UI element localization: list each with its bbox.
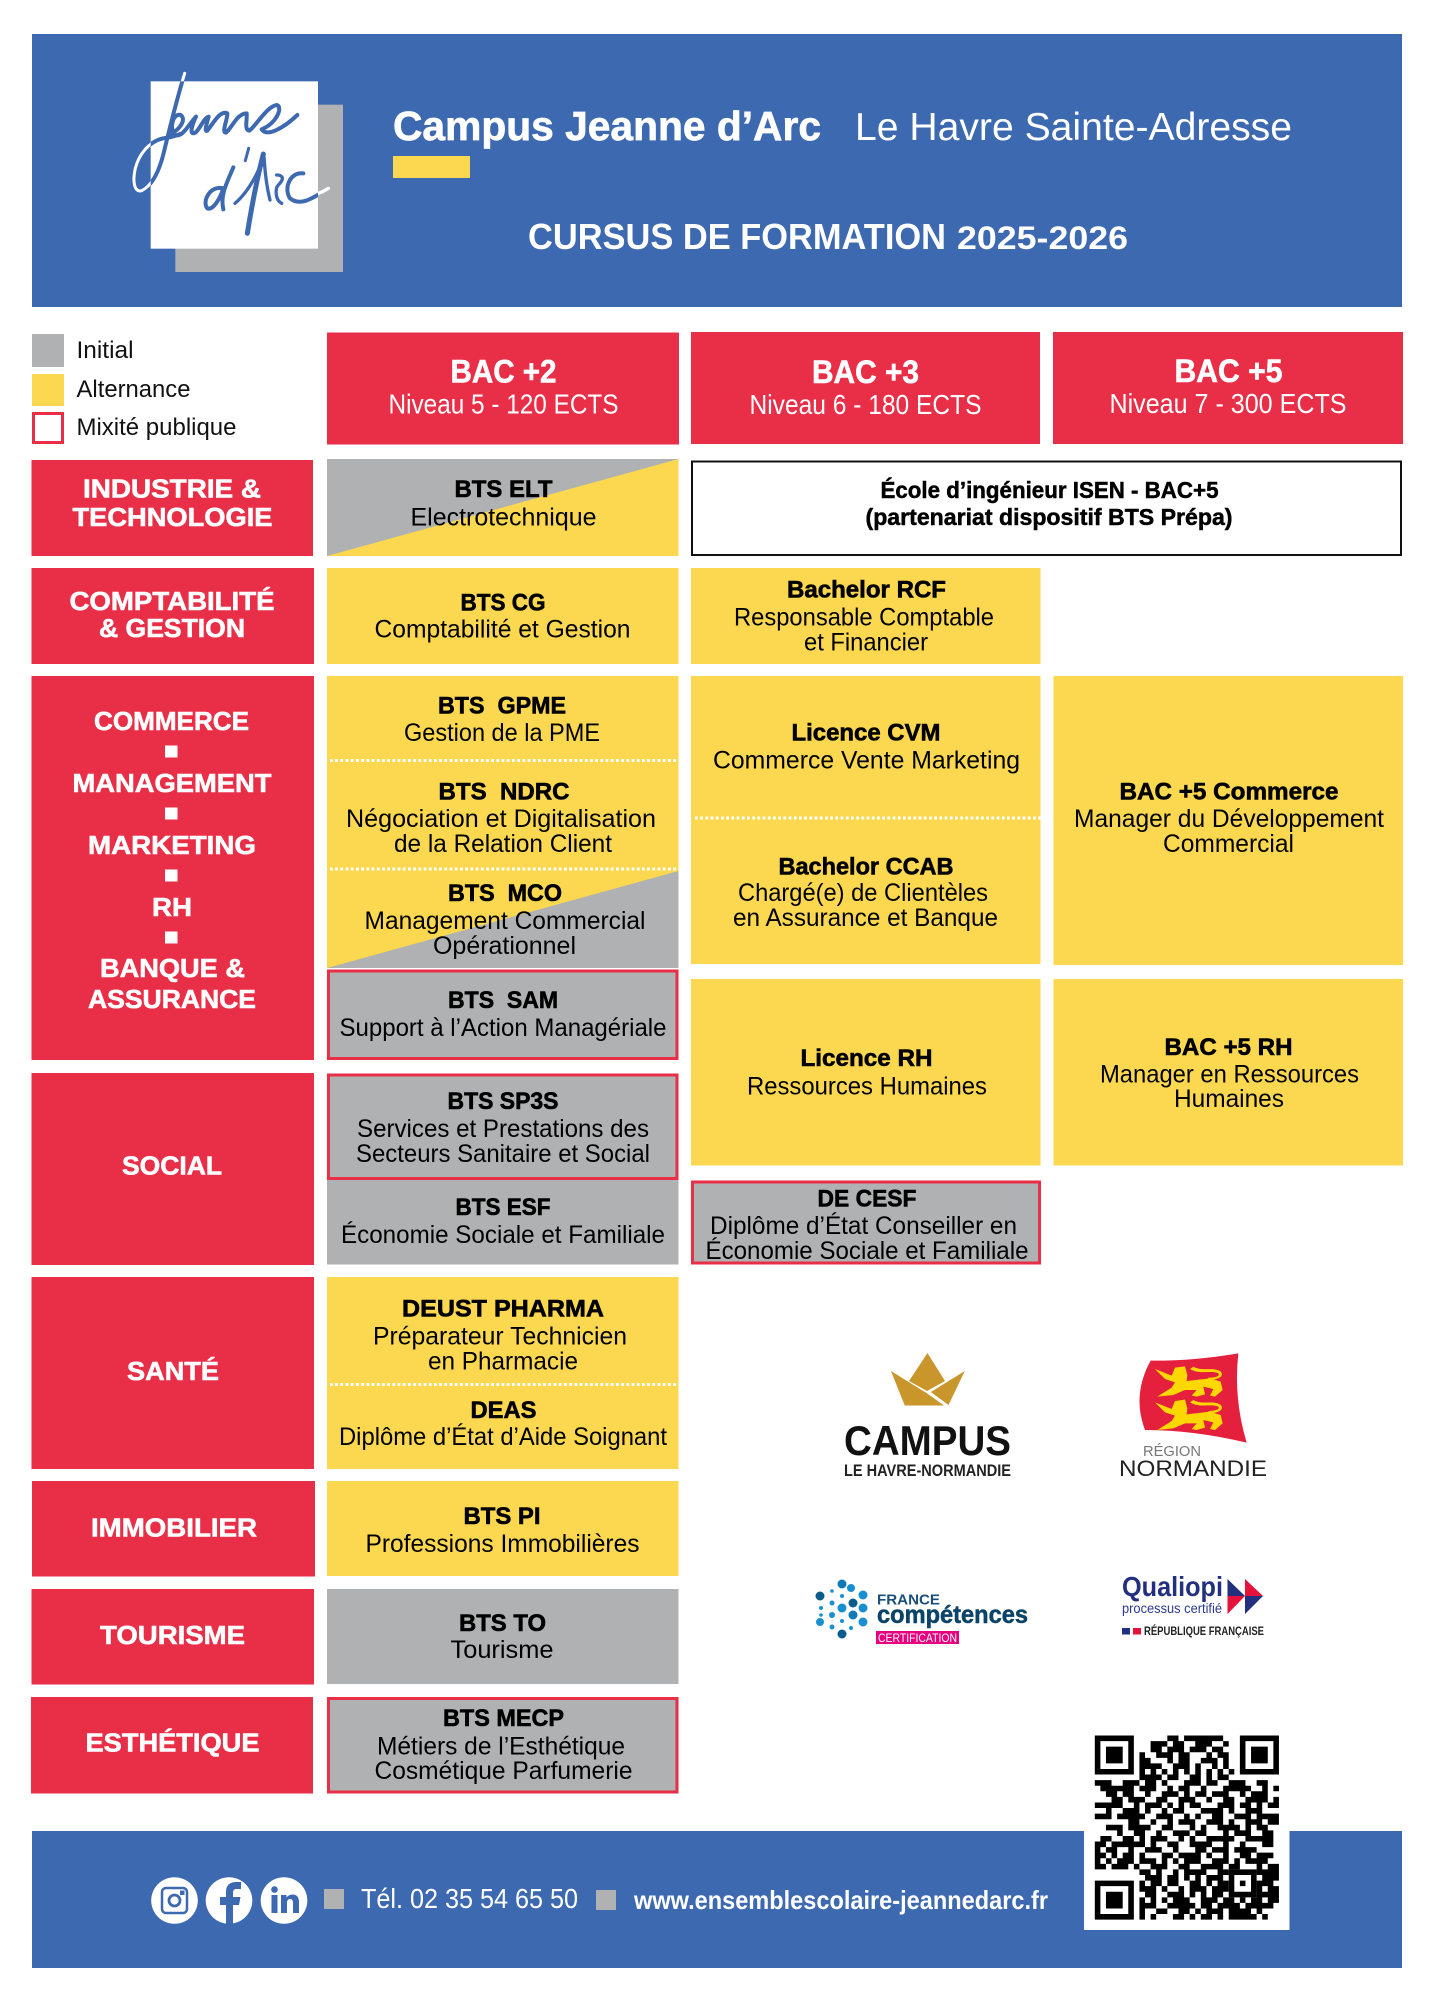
column header: BAC +2: BAC +2 bbox=[450, 354, 556, 390]
BTS MECP: BTS MECP bbox=[443, 1705, 564, 1732]
Licence CVM: Commerce Vente Marketing bbox=[713, 746, 1020, 774]
DE CESF bbox=[692, 1182, 1040, 1265]
icon: Facebook bbox=[206, 1877, 252, 1924]
logo: France compétences: CERTIFICATION bbox=[878, 1631, 957, 1645]
BTS ELT: BTS ELT bbox=[454, 476, 553, 503]
BAC +5 Commerce bbox=[1054, 676, 1403, 965]
column header: BAC +5 bbox=[1053, 332, 1403, 444]
BTS GPME: BTS GPME bbox=[438, 692, 566, 720]
Bachelor CCAB bbox=[733, 854, 998, 932]
BTS ESF bbox=[327, 1180, 678, 1264]
DEAS: Diplôme d’État d’Aide Soignant bbox=[339, 1422, 667, 1451]
BTS NDRC bbox=[346, 778, 656, 858]
DE CESF: DE CESF bbox=[818, 1186, 916, 1212]
category: Commerce, management, marketing, RH, banque et assurance: RH bbox=[152, 892, 192, 922]
BAC +5 RH bbox=[1054, 979, 1403, 1166]
subtitle: 2025-2026 bbox=[957, 220, 1128, 256]
logo: France compétences bbox=[816, 1580, 1028, 1645]
Licence CVM bbox=[713, 720, 1020, 774]
column header: BAC +3 bbox=[691, 332, 1040, 444]
logo: Région Normandie: RÉGION bbox=[1143, 1443, 1201, 1460]
BTS PI: BTS PI bbox=[464, 1503, 540, 1530]
category: Commerce, management, marketing, RH, banque et assurance: COMMERCE bbox=[94, 706, 249, 736]
category: Tourisme: TOURISME bbox=[100, 1620, 245, 1650]
BTS TO: Tourisme bbox=[450, 1636, 554, 1664]
DEUST PHARMA: Préparateur Technicien bbox=[373, 1322, 627, 1350]
legend: Mixité publique bbox=[76, 414, 236, 441]
logo: France compétences: compétences bbox=[877, 1601, 1028, 1629]
logo: Qualiopi: processus certifié bbox=[1122, 1601, 1222, 1616]
QR code bbox=[1084, 1724, 1290, 1930]
Bachelor CCAB: Chargé(e) de Clientèles bbox=[738, 879, 988, 907]
category: Immobilier: IMMOBILIER bbox=[91, 1512, 257, 1542]
category: Industrie et technologie: INDUSTRIE & bbox=[83, 474, 261, 504]
logo: France compétences: FRANCE bbox=[877, 1592, 940, 1608]
BTS SAM bbox=[328, 971, 677, 1058]
École d'ingénieur ISEN: École d’ingénieur ISEN - BAC+5 bbox=[880, 476, 1219, 503]
Licence CVM and Bachelor CCAB bbox=[691, 676, 1040, 964]
BTS ELT bbox=[327, 459, 678, 556]
separator square bbox=[324, 1889, 344, 1909]
category: Tourisme bbox=[32, 1589, 314, 1684]
Bachelor RCF: et Financier bbox=[804, 628, 928, 656]
title: Campus Jeanne d’Arc bbox=[393, 103, 821, 149]
BTS MCO: Opérationnel bbox=[433, 932, 576, 960]
BTS SAM: BTS SAM bbox=[448, 987, 558, 1014]
category: Social bbox=[32, 1073, 314, 1265]
École d'ingénieur ISEN bbox=[692, 462, 1401, 555]
BAC +5 Commerce: BAC +5 Commerce bbox=[1120, 778, 1338, 806]
category: Immobilier bbox=[32, 1481, 315, 1576]
BTS MECP: Métiers de l’Esthétique bbox=[377, 1732, 625, 1760]
category: Comptabilité et gestion bbox=[32, 568, 314, 664]
DEUST PHARMA: DEUST PHARMA bbox=[402, 1296, 604, 1322]
icon: LinkedIn bbox=[261, 1877, 307, 1924]
phone number: Tél. 02 35 54 65 50 bbox=[361, 1883, 578, 1914]
category: Commerce, management, marketing, RH, banque et assurance: MARKETING bbox=[88, 830, 256, 860]
logo: Campus Le Havre-Normandie bbox=[844, 1353, 1011, 1480]
title: Le Havre Sainte-Adresse bbox=[855, 106, 1292, 149]
BTS TO bbox=[327, 1589, 678, 1684]
logo: Campus Le Havre-Normandie: CAMPUS bbox=[844, 1417, 1011, 1464]
DEAS: DEAS bbox=[470, 1397, 536, 1424]
BTS SP3S: Services et Prestations des bbox=[357, 1115, 649, 1143]
column header: BAC +2 bbox=[327, 332, 679, 444]
category: Santé bbox=[32, 1277, 314, 1469]
BTS SP3S: BTS SP3S bbox=[448, 1088, 558, 1115]
logo: Qualiopi bbox=[1122, 1571, 1264, 1638]
category: Commerce, management, marketing, RH, banque et assurance: MANAGEMENT bbox=[72, 768, 272, 798]
BTS SP3S bbox=[328, 1075, 677, 1178]
category: Commerce, management, marketing, RH, banque et assurance: ASSURANCE bbox=[88, 984, 256, 1014]
legend: Alternance bbox=[76, 376, 190, 403]
BTS CG: Comptabilité et Gestion bbox=[374, 616, 630, 644]
DEUST PHARMA and DEAS bbox=[327, 1277, 678, 1469]
DE CESF: Économie Sociale et Familiale bbox=[706, 1236, 1028, 1265]
BTS SP3S: Secteurs Sanitaire et Social bbox=[356, 1140, 650, 1168]
logo: Région Normandie: NORMANDIE bbox=[1119, 1456, 1267, 1481]
BTS MECP: Cosmétique Parfumerie bbox=[374, 1757, 632, 1785]
Licence RH: Licence RH bbox=[800, 1045, 932, 1072]
category: Esthétique bbox=[31, 1697, 313, 1794]
BTS PI bbox=[327, 1481, 678, 1576]
legend bbox=[32, 334, 236, 442]
logo: Qualiopi: RÉPUBLIQUE FRANÇAISE bbox=[1144, 1625, 1264, 1638]
BTS ESF: BTS ESF bbox=[456, 1194, 550, 1221]
Licence CVM: Licence CVM bbox=[792, 720, 940, 746]
DEUST PHARMA bbox=[373, 1296, 627, 1376]
BTS CG: BTS CG bbox=[460, 590, 546, 616]
Bachelor CCAB: en Assurance et Banque bbox=[733, 904, 998, 932]
BTS MECP bbox=[328, 1698, 677, 1792]
column header: BAC +3: BAC +3 bbox=[812, 354, 919, 390]
Commerce BTS block: GPME, NDRC, MCO bbox=[327, 676, 678, 968]
category: Industrie et technologie bbox=[32, 460, 313, 556]
DEUST PHARMA: en Pharmacie bbox=[428, 1348, 578, 1376]
title bbox=[393, 103, 1292, 149]
BTS NDRC: de la Relation Client bbox=[394, 830, 612, 858]
category: Industrie et technologie: TECHNOLOGIE bbox=[72, 502, 272, 532]
icon: Instagram bbox=[151, 1877, 198, 1924]
logo: Région Normandie bbox=[1119, 1353, 1267, 1481]
BTS NDRC: BTS NDRC bbox=[438, 778, 570, 806]
category: Commerce, management, marketing, RH, banque et assurance bbox=[32, 676, 314, 1060]
Bachelor RCF: Bachelor RCF bbox=[787, 576, 946, 604]
BTS GPME bbox=[404, 692, 600, 747]
BTS GPME: Gestion de la PME bbox=[404, 719, 600, 747]
BTS PI: Professions Immobilières bbox=[366, 1530, 640, 1558]
category: Comptabilité et gestion: & GESTION bbox=[99, 613, 245, 643]
category: Commerce, management, marketing, RH, banque et assurance: BANQUE & bbox=[100, 953, 245, 983]
subtitle: CURSUS DE FORMATION bbox=[528, 216, 946, 257]
legend: Initial bbox=[76, 337, 134, 364]
BTS MCO bbox=[364, 880, 646, 960]
category: Santé: SANTÉ bbox=[127, 1356, 219, 1386]
BTS CG bbox=[327, 568, 678, 664]
separator square bbox=[596, 1890, 616, 1910]
BTS MCO: Management Commercial bbox=[364, 907, 646, 935]
column header: BAC +2: Niveau 5 - 120 ECTS bbox=[388, 388, 618, 420]
BAC +5 RH: Manager en Ressources bbox=[1100, 1060, 1359, 1088]
BTS NDRC: Négociation et Digitalisation bbox=[346, 805, 656, 833]
Bachelor RCF bbox=[691, 568, 1040, 664]
Bachelor CCAB: Bachelor CCAB bbox=[778, 854, 954, 880]
column header: BAC +5: Niveau 7 - 300 ECTS bbox=[1110, 388, 1346, 419]
website: www.ensemblescolaire-jeannedarc.fr bbox=[633, 1885, 1048, 1915]
DEAS bbox=[339, 1397, 667, 1451]
BTS TO: BTS TO bbox=[459, 1610, 546, 1637]
column header: BAC +3: Niveau 6 - 180 ECTS bbox=[750, 389, 982, 420]
logo: Campus Le Havre-Normandie: LE HAVRE-NORMANDIE bbox=[844, 1461, 1011, 1480]
category: Esthétique: ESTHÉTIQUE bbox=[86, 1728, 260, 1758]
footer bar bbox=[32, 1831, 1402, 1968]
logo: Qualiopi: Qualiopi bbox=[1122, 1571, 1223, 1602]
header banner bbox=[32, 34, 1402, 307]
Bachelor RCF: Responsable Comptable bbox=[734, 604, 994, 632]
category: Social: SOCIAL bbox=[122, 1150, 222, 1180]
DE CESF: Diplôme d’État Conseiller en bbox=[710, 1211, 1017, 1240]
BTS SAM: Support à l’Action Managériale bbox=[340, 1014, 666, 1042]
BTS MCO: BTS MCO bbox=[448, 880, 562, 907]
Licence RH bbox=[691, 979, 1040, 1166]
logo: Jeanne d'Arc bbox=[134, 73, 343, 272]
BAC +5 RH: Humaines bbox=[1174, 1085, 1284, 1113]
BAC +5 Commerce: Commercial bbox=[1163, 830, 1294, 858]
BTS ELT: Electrotechnique bbox=[410, 504, 596, 532]
BAC +5 RH: BAC +5 RH bbox=[1164, 1034, 1292, 1061]
École d'ingénieur ISEN: (partenariat dispositif BTS Prépa) bbox=[866, 504, 1232, 530]
BTS ESF: Économie Sociale et Familiale bbox=[341, 1220, 665, 1249]
Licence RH: Ressources Humaines bbox=[747, 1072, 987, 1100]
category: Comptabilité et gestion: COMPTABILITÉ bbox=[70, 586, 274, 616]
yellow accent bar bbox=[393, 156, 470, 178]
column header: BAC +5: BAC +5 bbox=[1174, 353, 1282, 389]
BAC +5 Commerce: Manager du Développement bbox=[1074, 805, 1384, 833]
